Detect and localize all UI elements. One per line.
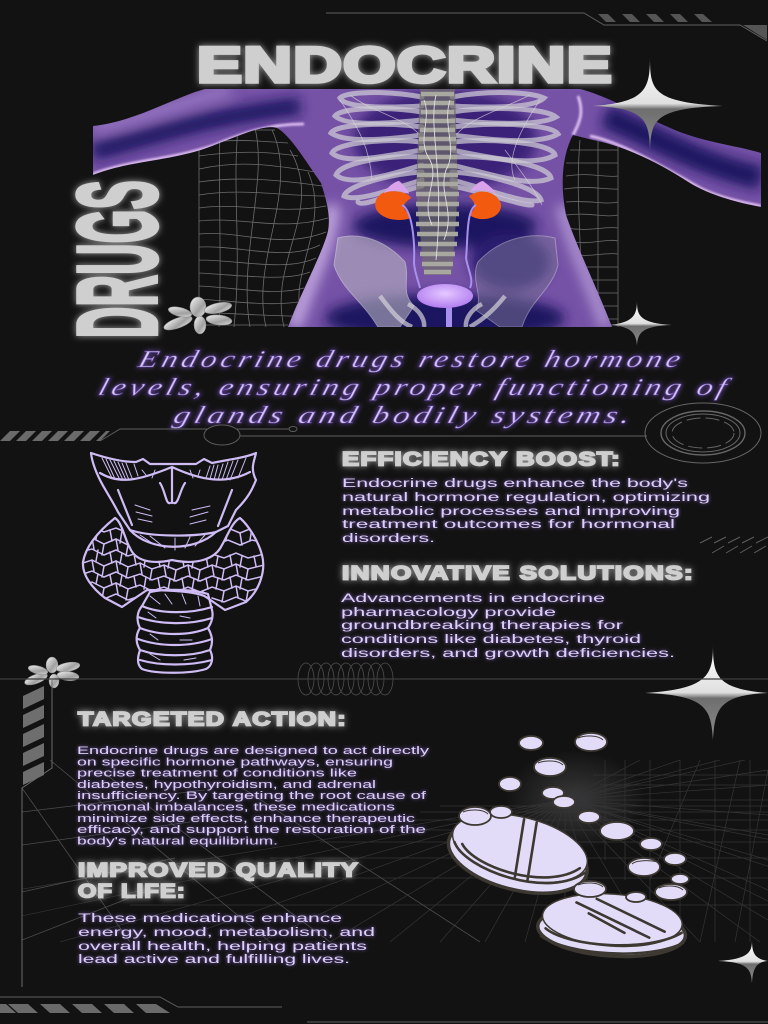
title: ENDOCRINE: ENDOCRINE [197, 37, 613, 93]
body text: overall health, helping patients [78, 939, 367, 953]
heading: EFFICIENCY BOOST: [342, 450, 621, 470]
tagline: Endocrine drugs restore hormone [134, 346, 688, 373]
skin base [93, 89, 763, 327]
sparkle star bottom right [718, 940, 768, 983]
section: innovative solutions [341, 564, 694, 660]
concentric circle ornament [645, 403, 761, 463]
warped grid behind the body [199, 128, 618, 327]
body text: energy, mood, metabolism, and [78, 925, 375, 939]
body text: treatment outcomes for hormonal [342, 517, 675, 531]
body text [77, 745, 430, 848]
trachea [137, 590, 213, 673]
body text [342, 476, 710, 545]
bottom right rule [307, 1021, 768, 1023]
heading: TARGETED ACTION: [78, 710, 347, 730]
body text: groundbreaking therapies for [341, 618, 623, 632]
spine [416, 89, 459, 275]
sparkle star mid right [645, 645, 768, 740]
heading: OF LIFE: [78, 882, 186, 902]
body text: These medications enhance [78, 911, 342, 925]
body text: Endocrine drugs are designed to act directly [77, 745, 430, 757]
body text: conditions like diabetes, thyroid [341, 632, 641, 646]
body text: efficacy, and support the restoration of the [77, 824, 426, 836]
body text: Endocrine drugs enhance the body's [342, 476, 688, 490]
body text [78, 911, 375, 966]
body text: precise treatment of conditions like [77, 768, 357, 780]
urethra [446, 308, 452, 327]
body text: pharmacology provide [341, 605, 556, 619]
heading: INNOVATIVE SOLUTIONS: [342, 564, 694, 584]
flower ornament top [162, 297, 233, 334]
rib cage [331, 93, 558, 205]
pill lower right [536, 889, 688, 961]
body text: diabetes, hypothyroidism, and adrenal [77, 779, 376, 791]
skin highlights [93, 96, 761, 206]
body illustration [93, 89, 763, 342]
kidney left [375, 191, 411, 220]
hatch decoration [700, 537, 768, 553]
lobe cell mesh [80, 527, 268, 602]
middle divider decoration [0, 425, 647, 445]
pelvis [334, 236, 558, 327]
body text: minimize side effects, enhance therapeutic [77, 813, 416, 825]
top corner decoration [326, 13, 767, 41]
body text: Advancements in endocrine [341, 591, 605, 605]
lower perspective grid [0, 750, 768, 942]
horizontal divider [0, 678, 768, 680]
wiry vessels [340, 95, 542, 205]
body text: disorders, and growth deficiencies. [341, 646, 675, 660]
body text: on specific hormone pathways, ensuring [77, 756, 393, 768]
hatch and coil ornament [298, 663, 393, 695]
hyoid and thyroid cartilage [91, 453, 256, 536]
tagline: glands and bodily systems. [170, 402, 638, 429]
body text: insufficiency. By targeting the root cause of [77, 790, 428, 802]
sparkle star small [608, 301, 672, 346]
kidney right [469, 192, 501, 219]
tagline: levels, ensuring proper functioning of [95, 374, 734, 401]
pills and bubbles illustration [441, 733, 689, 961]
section: targeted action [77, 710, 430, 848]
body text: natural hormone regulation, optimizing [342, 490, 710, 504]
body text: lead active and fulfilling lives. [78, 952, 350, 966]
skin shading [93, 90, 761, 342]
flower ornament left [23, 657, 81, 688]
pill upper left [441, 801, 596, 906]
bottom left decoration [0, 997, 282, 1013]
body text: metabolic processes and improving [342, 504, 680, 518]
ureters [402, 205, 476, 288]
body text: body's natural equilibrium. [77, 836, 278, 848]
adrenal glands [384, 181, 496, 194]
left side rail with stripes [22, 680, 52, 987]
body text [341, 591, 675, 660]
thyroid illustration [80, 453, 268, 673]
thyroid lobes [83, 518, 263, 610]
bubbles [459, 733, 689, 902]
tagline [95, 346, 734, 429]
section: efficiency boost [342, 450, 710, 545]
bladder [417, 284, 473, 308]
heading: IMPROVED QUALITY [78, 860, 359, 882]
section: improved quality of life [78, 860, 375, 966]
body text: hormonal imbalances, these medications [77, 802, 396, 814]
body text: disorders. [342, 531, 435, 545]
sparkle star top [593, 57, 723, 150]
heading [78, 860, 359, 902]
